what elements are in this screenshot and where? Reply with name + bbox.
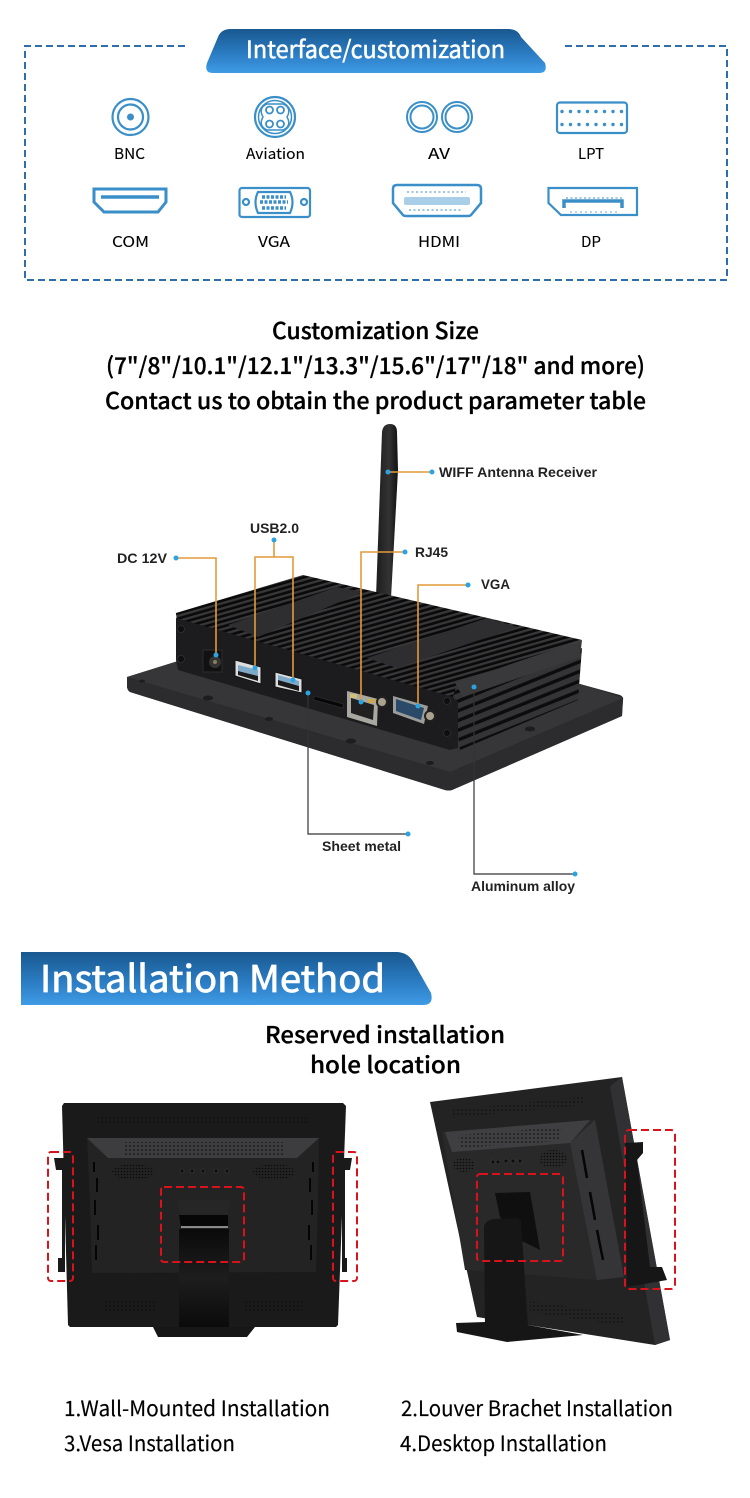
heading tab xyxy=(206,29,546,73)
housing vents xyxy=(123,1142,283,1155)
top vent xyxy=(98,1117,307,1125)
callout: sheet metal: Sheet metal xyxy=(322,838,401,854)
stand column xyxy=(484,1218,528,1327)
flat band left xyxy=(228,587,363,637)
icon: AV xyxy=(407,102,472,132)
antenna xyxy=(376,424,398,598)
side slots xyxy=(582,1150,603,1260)
left bracket xyxy=(54,1158,65,1272)
subheading: reserved holes: Reserved installation xyxy=(265,1016,505,1050)
side slots xyxy=(94,1162,313,1260)
icon: COM xyxy=(94,189,166,212)
heatsink top fins xyxy=(175,575,582,700)
hinge highlight xyxy=(181,1226,228,1228)
band vents xyxy=(458,1127,562,1148)
callout: VGA: VGA xyxy=(481,576,510,592)
callout: DC 12V xyxy=(117,550,218,658)
callout: VGA xyxy=(416,576,510,708)
callout: WIFF antenna: WIFF Antenna Receiver xyxy=(439,464,598,480)
red outline: left xyxy=(48,1152,73,1281)
speaker right xyxy=(253,1164,295,1180)
list: installation types xyxy=(64,1393,673,1458)
USB port 2 xyxy=(275,672,302,693)
label: AV: AV xyxy=(428,143,450,164)
housing band xyxy=(445,1120,590,1152)
callout: sheet metal xyxy=(306,690,410,854)
stand column xyxy=(179,1229,229,1327)
side fins xyxy=(453,648,582,750)
icon: VGA xyxy=(240,188,310,217)
label: Aviation: Aviation xyxy=(246,143,305,164)
photo: monitor rear view xyxy=(48,1103,357,1337)
heading tab: Interface/customization xyxy=(246,30,505,65)
label: VGA: VGA xyxy=(258,231,291,252)
red outline: right xyxy=(333,1152,357,1281)
icon: LPT xyxy=(557,102,627,133)
speaker left xyxy=(112,1164,154,1180)
stand foot xyxy=(456,1322,583,1342)
bracket xyxy=(625,1142,667,1287)
speaker left xyxy=(453,1158,475,1172)
list: installation types: 3.Vesa Installation xyxy=(64,1428,235,1458)
subheading: reserved holes: hole location xyxy=(310,1046,461,1080)
red outline: center xyxy=(161,1187,244,1262)
RJ45 port xyxy=(347,691,378,726)
photo: monitor angled view xyxy=(430,1077,675,1345)
card slot xyxy=(314,696,343,708)
top vent xyxy=(451,1097,584,1118)
callout: USB2.0 xyxy=(250,520,299,682)
label: DP: DP xyxy=(581,231,601,252)
monitor side edge xyxy=(610,1077,670,1345)
stand neck xyxy=(495,1192,540,1250)
housing xyxy=(87,1138,319,1273)
red outline: right xyxy=(625,1130,675,1289)
monitor body xyxy=(62,1103,346,1327)
callout: USB2.0: USB2.0 xyxy=(250,520,299,536)
VGA port xyxy=(377,696,435,724)
callout: aluminum alloy xyxy=(471,684,578,894)
list: installation types: 1.Wall-Mounted Installation xyxy=(64,1393,330,1423)
rear buttons xyxy=(180,1169,229,1173)
right bracket xyxy=(342,1158,352,1272)
bottom vents xyxy=(103,1300,302,1313)
callout: RJ45: RJ45 xyxy=(415,544,448,560)
icon: DP xyxy=(548,188,637,215)
dashed frame xyxy=(25,46,727,280)
icon: Aviation xyxy=(255,97,295,137)
heading: customization size: Customization Size xyxy=(272,312,479,346)
heading: customization size: Contact us to obtain the product parameter table xyxy=(105,382,646,416)
base plate xyxy=(127,602,623,790)
housing top band xyxy=(87,1138,319,1158)
front face xyxy=(176,618,458,750)
red outline: center xyxy=(477,1174,563,1261)
list: installation types: 4.Desktop Installation xyxy=(400,1428,607,1458)
speaker right xyxy=(539,1150,567,1168)
list: installation types: 2.Louver Brachet Installation xyxy=(401,1393,673,1423)
callout: DC 12V: DC 12V xyxy=(117,550,168,566)
monitor body xyxy=(430,1077,670,1345)
stand foot xyxy=(153,1327,255,1337)
housing xyxy=(442,1120,624,1280)
heading: customization size: (7"/8"/10.1"/12.1"/13.3"/15.6"/17"/18" and more) xyxy=(106,347,645,381)
callout: aluminum alloy: Aluminum alloy xyxy=(471,878,575,894)
housing side xyxy=(570,1120,624,1280)
panel: interface customization xyxy=(25,29,727,280)
subheading: reserved holes xyxy=(265,1016,505,1080)
callout: RJ45 xyxy=(358,544,448,704)
label: COM: COM xyxy=(112,231,149,252)
stand head xyxy=(177,1200,230,1228)
side top band xyxy=(455,640,582,697)
USB port 1 xyxy=(235,660,261,684)
label: BNC: BNC xyxy=(114,143,145,164)
flat band right xyxy=(367,618,518,668)
rear buttons xyxy=(491,1159,522,1164)
icon: HDMI xyxy=(393,185,481,216)
heading: customization size xyxy=(105,312,646,416)
label: LPT: LPT xyxy=(578,143,604,164)
heading: installation method: Installation Method xyxy=(40,949,385,1003)
lower vents xyxy=(530,1301,625,1326)
panel: device photo with port callouts xyxy=(117,424,623,894)
label: HDMI: HDMI xyxy=(418,231,460,252)
DC jack xyxy=(203,650,222,672)
icon: BNC xyxy=(112,99,148,135)
